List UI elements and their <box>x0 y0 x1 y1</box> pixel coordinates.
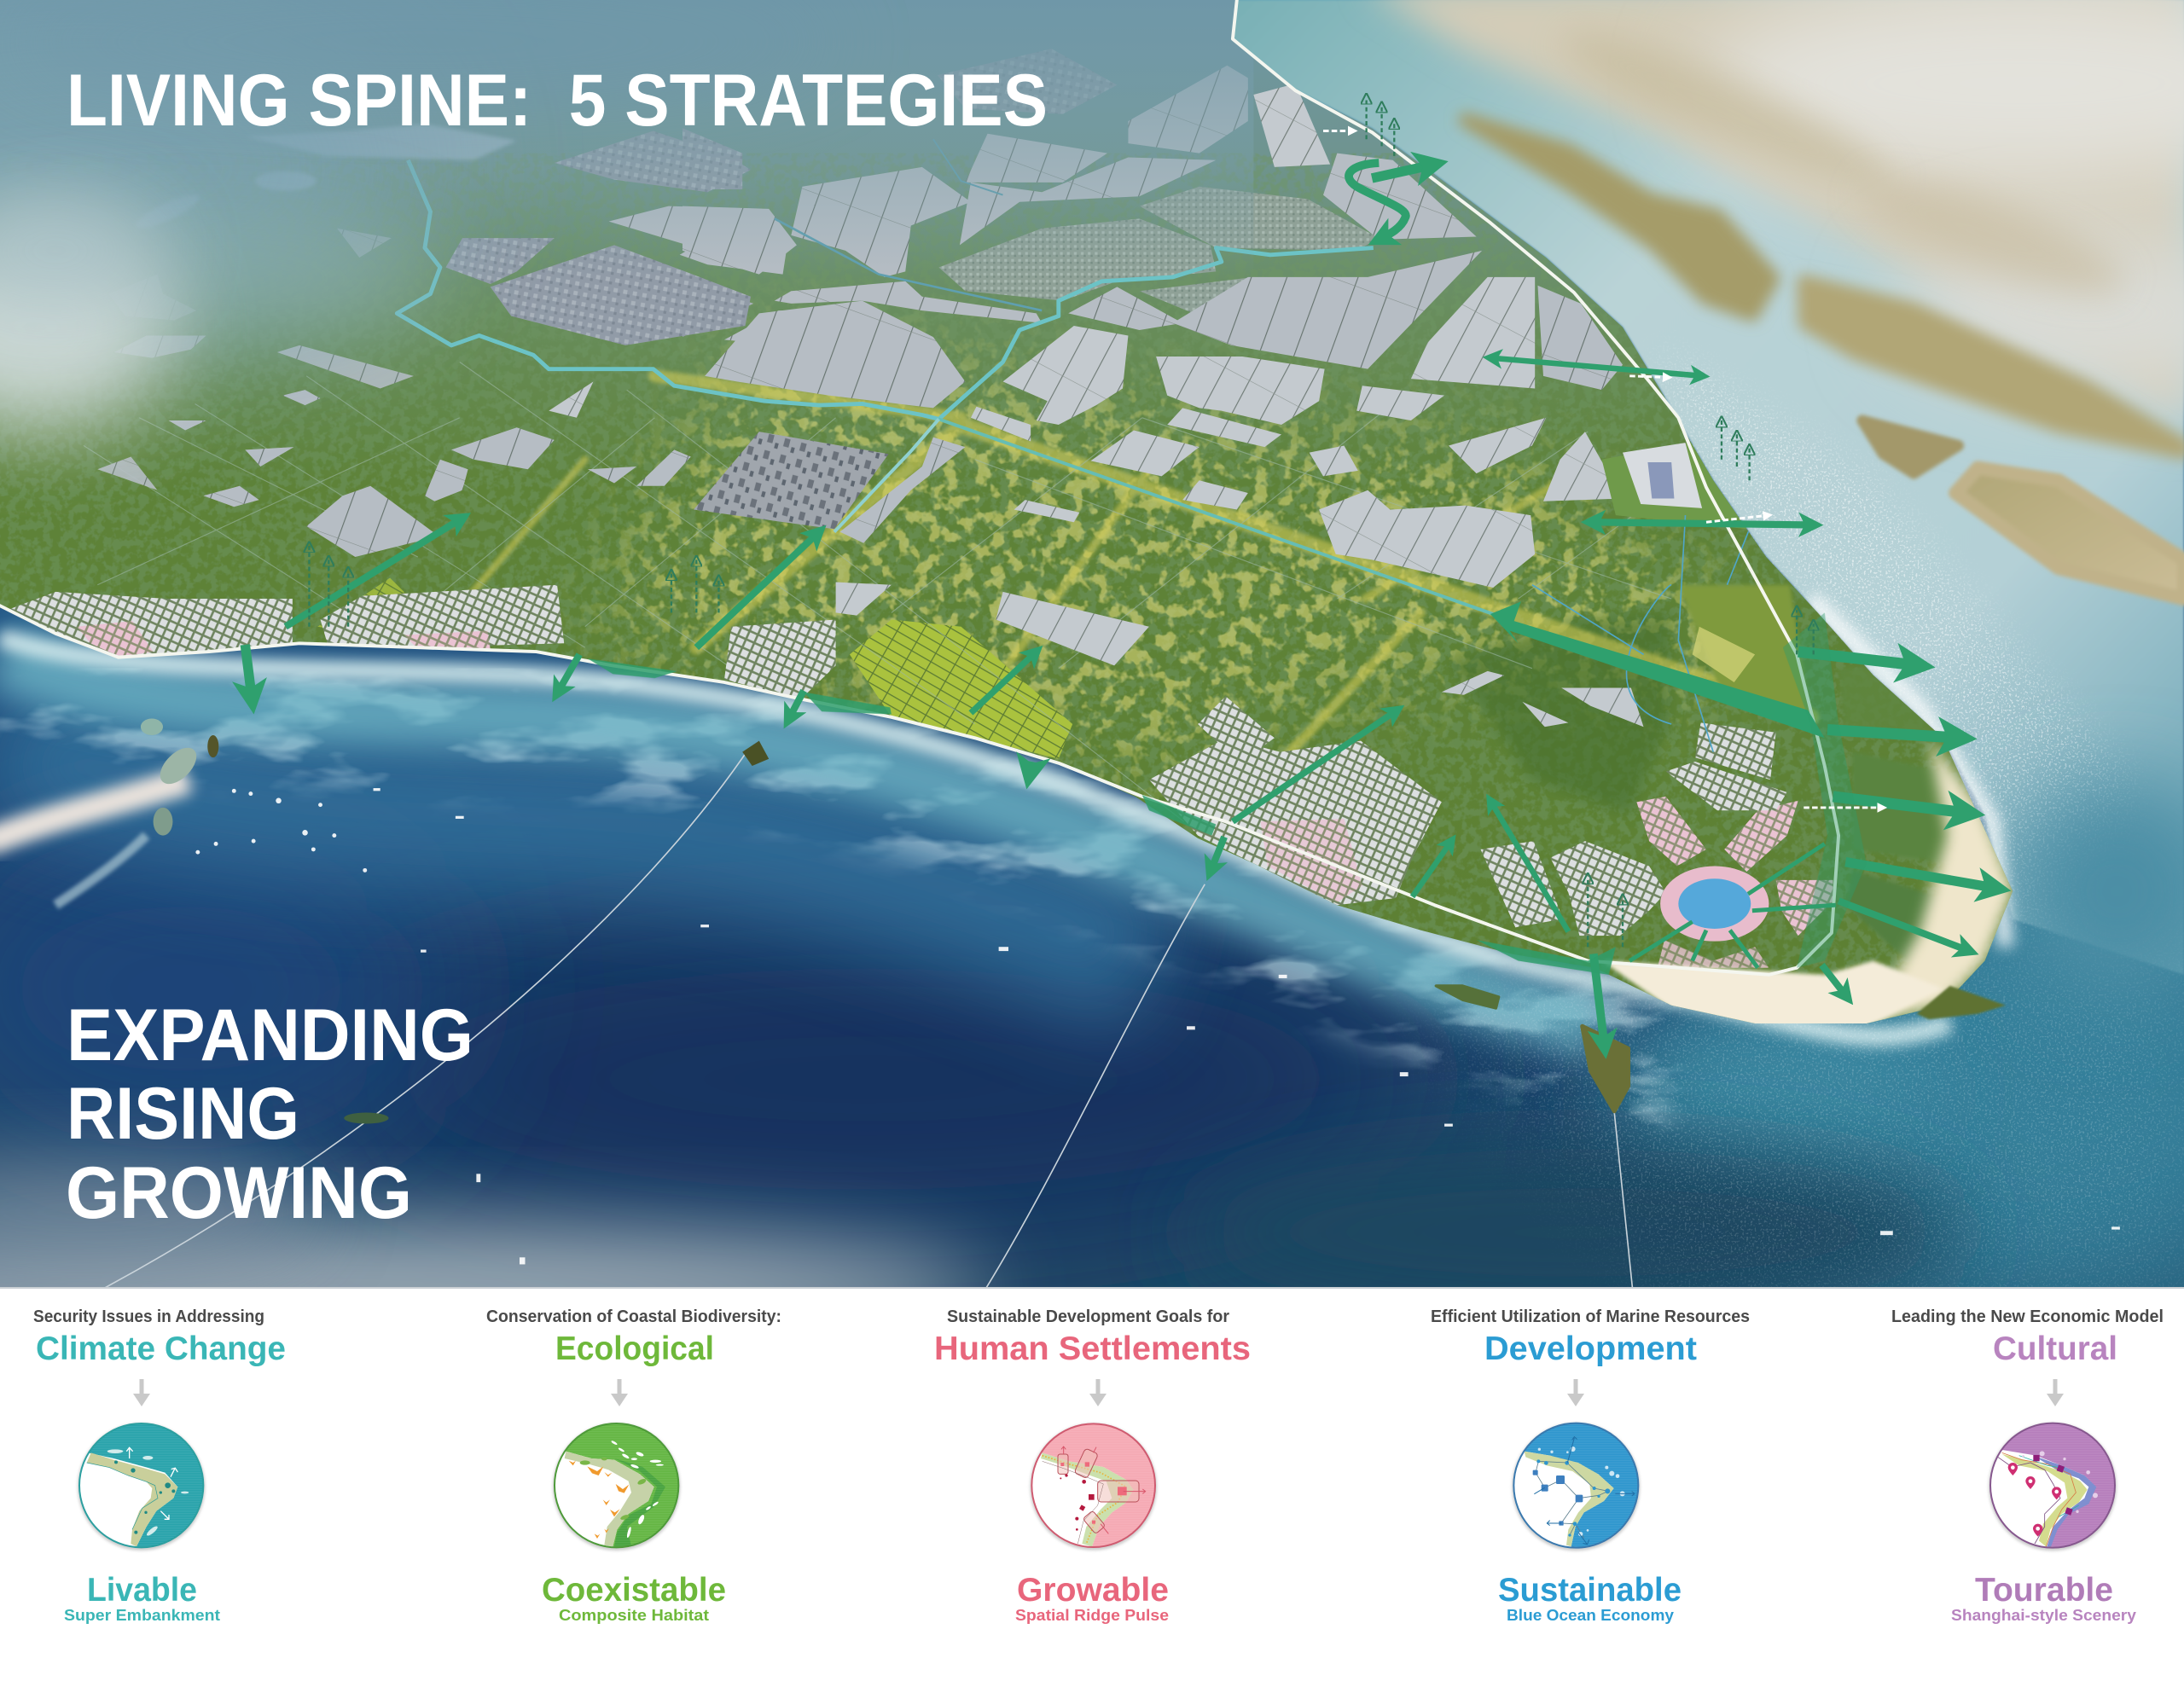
large dark grey industrial block <box>694 432 889 529</box>
icon: composite habitat <box>553 1416 688 1552</box>
heading: Expanding Rising Growing: RISING <box>67 1073 299 1155</box>
panel: climate change strategy <box>33 1307 286 1624</box>
dashed upward green arrows <box>309 97 1814 947</box>
arrow: south shore 1 <box>245 645 253 700</box>
arrow: east 1 <box>1798 652 1920 665</box>
arrow <box>1567 1379 1584 1406</box>
intro text: Conservation of Coastal Biodiversity: <box>486 1307 781 1326</box>
upper right haze over mudflats <box>1365 0 2184 418</box>
intro text: Security Issues in Addressing <box>33 1307 264 1326</box>
panel: ecological strategy <box>486 1307 781 1624</box>
result word: Coexistable <box>542 1572 726 1609</box>
green shoreline bands <box>588 612 1867 975</box>
arrow: airport cross corridor <box>1490 358 1702 376</box>
hazy lakes <box>132 124 517 234</box>
sand islands in estuary <box>1466 119 2184 599</box>
icon: spatial ridge pulse <box>1030 1416 1166 1552</box>
dashed white arrows <box>1323 130 1883 808</box>
green corridor arrows <box>245 163 1997 1047</box>
thin road network <box>84 362 1671 821</box>
hub spokes <box>1629 844 1836 968</box>
top haze over land <box>0 0 1253 279</box>
birds and ships <box>195 788 2120 1264</box>
intro text: Sustainable Development Goals for <box>947 1307 1229 1326</box>
yellow-green coastal paddies <box>850 620 1072 759</box>
arrow: hub to north-west <box>1490 801 1568 931</box>
offshore cables <box>104 752 1632 1288</box>
eastern forest fans and beach <box>1838 662 2013 1023</box>
arrow <box>2047 1379 2064 1406</box>
arrow <box>611 1379 628 1406</box>
result subtitle: Composite Habitat <box>559 1607 709 1624</box>
arrow: mid estuary corridor <box>1590 522 1814 525</box>
arrow: east 2 <box>1827 730 1961 738</box>
arrow <box>1089 1379 1107 1406</box>
icon: blue ocean economy <box>1512 1416 1653 1552</box>
arrow: north-east corridor 3 <box>971 652 1037 713</box>
arrow: east 5 <box>1838 901 1970 951</box>
wetland park <box>1678 585 1810 717</box>
heading: Expanding Rising Growing: GROWING <box>66 1152 412 1234</box>
arrow <box>133 1379 150 1406</box>
panel: cultural strategy <box>1891 1307 2164 1624</box>
arrow: east 4 <box>1845 862 1997 889</box>
arrow: east 3 <box>1833 797 1970 813</box>
mottled grey cities <box>445 49 1379 345</box>
heading: Expanding Rising Growing: EXPANDING <box>67 994 473 1076</box>
result subtitle: Super Embankment <box>64 1607 220 1624</box>
arrow: north-east corridor 1 <box>286 518 462 627</box>
arrow: north estuary head <box>1372 165 1435 178</box>
heading: Ecological <box>555 1330 714 1367</box>
result subtitle: Blue Ocean Economy <box>1507 1607 1674 1624</box>
coastal city blocks <box>0 585 1563 927</box>
icon: shanghai-style scenery <box>1988 1416 2122 1552</box>
panel: human settlements strategy <box>934 1307 1251 1624</box>
land mass <box>0 0 2184 1058</box>
grey-white agricultural field blocks <box>97 66 1644 727</box>
sand bar and western islands <box>0 718 218 905</box>
heading: Human Settlements <box>934 1330 1251 1367</box>
offshore islands <box>344 741 2006 1124</box>
arrow: hub small <box>1413 841 1451 896</box>
airport <box>1602 438 1748 529</box>
arrow: south-east <box>1822 965 1847 997</box>
result word: Livable <box>87 1572 197 1609</box>
heading: Cultural <box>1993 1330 2117 1367</box>
east estuary water <box>1234 0 2184 1287</box>
yellow green corridors <box>432 376 1810 821</box>
fog bank on the north-west <box>0 0 836 432</box>
lake and ring district <box>1660 867 1769 942</box>
heading: Expanding Rising Growing <box>66 994 473 1234</box>
result word: Growable <box>1017 1572 1169 1609</box>
heading: Development <box>1484 1330 1697 1367</box>
arrow: long inland axis <box>1490 601 1825 738</box>
result subtitle: Spatial Ridge Pulse <box>1015 1607 1169 1624</box>
result subtitle: Shanghai-style Scenery <box>1951 1607 2136 1624</box>
icon: super embankment <box>77 1416 211 1552</box>
arrow: south shore 5 <box>1211 837 1224 872</box>
heading: Climate Change <box>36 1330 286 1367</box>
white spine road and coast road <box>0 0 1838 975</box>
arrow: south shore 3 <box>788 691 804 720</box>
arrow: south shore 4 <box>1030 762 1032 775</box>
intro text: Efficient Utilization of Marine Resources <box>1431 1307 1750 1326</box>
arrow: north river curve <box>1349 163 1406 240</box>
rivers and canals <box>397 139 1755 752</box>
result word: Sustainable <box>1498 1572 1682 1609</box>
result word: Tourable <box>1975 1572 2113 1609</box>
hub city around lake <box>1550 722 1833 968</box>
map bottom edge line <box>0 1287 2184 1289</box>
arrow: north-east corridor 4 <box>1233 710 1397 821</box>
arrow: north-east corridor 2 <box>696 532 819 647</box>
arrow: south to island <box>1594 954 1605 1047</box>
arrow: south shore 2 <box>557 654 579 693</box>
sandy beach <box>1602 961 1943 1028</box>
intro text: Leading the New Economic Model <box>1891 1307 2164 1326</box>
panel: development strategy <box>1431 1307 1750 1624</box>
title: Living Spine 5 Strategies: LIVING SPINE: 5 STRATEGIES <box>67 60 1048 142</box>
central dark forest <box>1449 612 1671 815</box>
